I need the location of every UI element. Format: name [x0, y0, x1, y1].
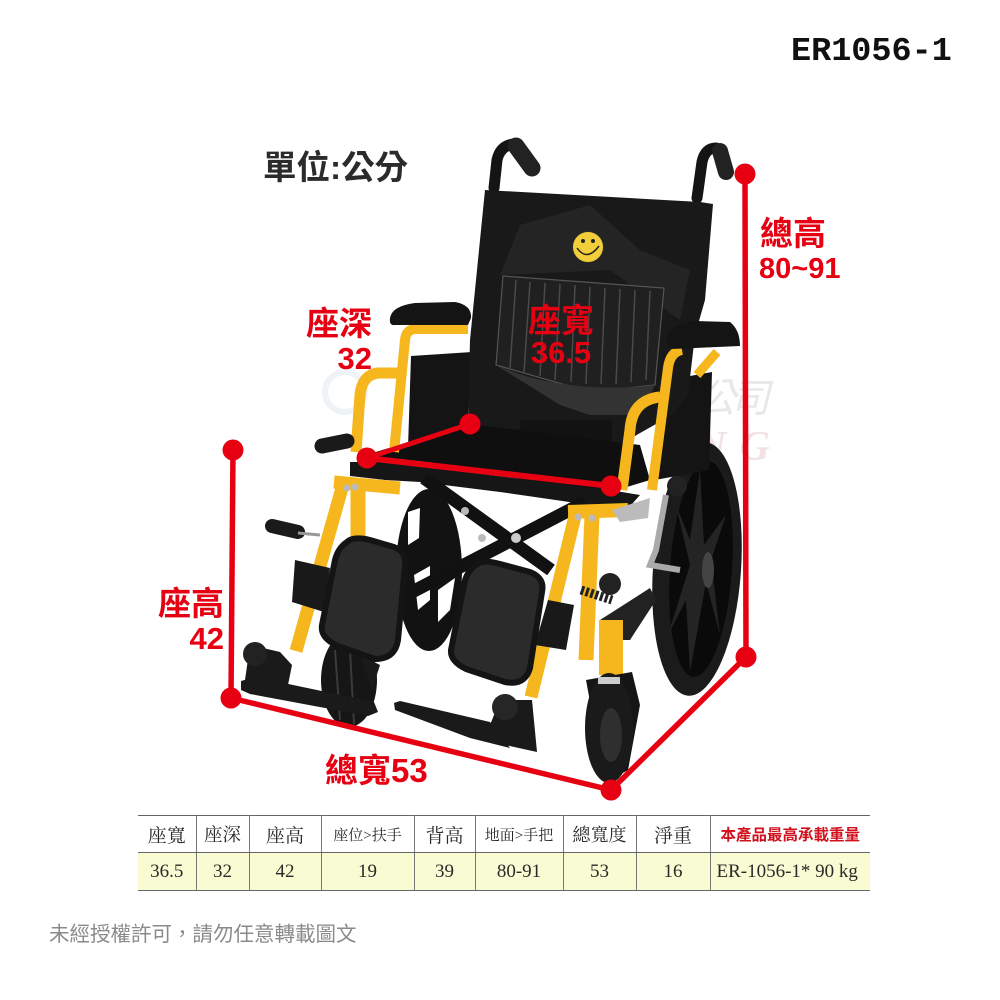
specification table: 53 [590, 860, 609, 882]
push handles [494, 144, 726, 198]
armrest pads [390, 302, 740, 349]
seat back pocket [496, 276, 664, 392]
label: total height: 總高 [760, 215, 826, 252]
right rear wheel [644, 439, 750, 699]
specification table: 背高 [425, 826, 464, 846]
label: seat width [528, 302, 594, 370]
label: seat depth: 座深 [306, 305, 372, 342]
unit note: 單位:公分 [263, 150, 408, 187]
label: seat depth: 32 [338, 341, 372, 376]
label: seat height [158, 585, 224, 656]
left caster [321, 633, 380, 727]
specification table: 座高 [266, 826, 304, 846]
label: total height: 80~91 [759, 253, 840, 285]
specification table: 座位>扶手 [333, 828, 402, 844]
smiley badge [572, 232, 604, 262]
specification table: 36.5 [150, 860, 183, 882]
specification table: 80-91 [497, 860, 541, 882]
label: total height [759, 215, 840, 285]
specification table: 19 [358, 860, 377, 882]
watermark: 恆伸醫療器材有限公司 [425, 377, 774, 421]
label: seat height: 42 [190, 621, 224, 656]
black knobs [272, 441, 687, 600]
label: seat depth [306, 305, 372, 376]
specification table: 本產品最高承載重量 [720, 827, 860, 844]
specification table: 座深 [204, 826, 241, 846]
label: seat height: 座高 [158, 585, 224, 622]
cross braces [412, 478, 656, 640]
specification table: ER-1056-1* 90 kg [716, 860, 858, 882]
frame bolts [344, 484, 596, 542]
label: seat width: 座寬 [528, 302, 594, 339]
footrests [241, 642, 537, 752]
specification table: 座寬 [148, 826, 186, 846]
front frame and legs [296, 482, 628, 697]
side panels [408, 352, 712, 480]
label: seat width: 36.5 [531, 335, 591, 370]
specification table: 32 [213, 860, 232, 882]
specification table: 42 [276, 860, 294, 882]
specification table: 總寬度 [572, 825, 626, 845]
right caster [585, 672, 640, 783]
specification table [138, 815, 870, 891]
backrest [468, 190, 713, 470]
specification table: 39 [435, 860, 454, 882]
yellow armrest frames [356, 329, 717, 490]
watermark [325, 372, 774, 470]
brake lever [612, 495, 680, 570]
specification table: 淨重 [654, 826, 692, 846]
product code title: ER1056-1 [791, 33, 952, 71]
height clamps [292, 560, 574, 650]
dimension end points [220, 164, 756, 800]
seat [362, 424, 650, 492]
seat underside and hinges [350, 462, 640, 512]
copyright notice: 未經授權許可，請勿任意轉載圖文 [49, 923, 356, 946]
left rear wheel [396, 489, 462, 651]
watermark: WERLONG [480, 424, 770, 470]
specification table: 16 [664, 860, 682, 882]
specification table: 地面>手把 [485, 828, 553, 844]
label: total width: 總寬53 [325, 752, 428, 789]
leg pads [322, 538, 542, 683]
dimension lines [231, 174, 746, 790]
